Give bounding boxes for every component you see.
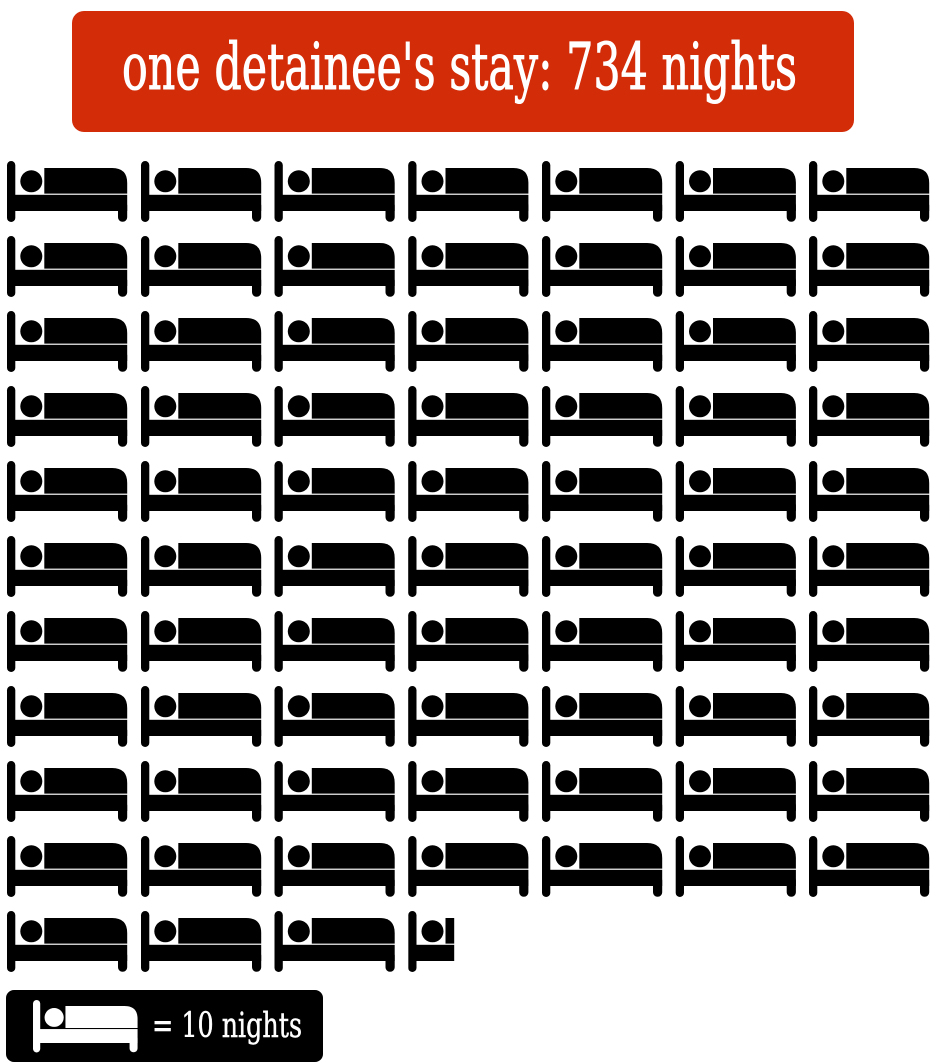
title banner bbox=[72, 11, 854, 132]
beds row 11 with partial bed bbox=[6, 911, 454, 972]
beds row 9 bbox=[7, 761, 929, 822]
legend bbox=[6, 990, 323, 1062]
beds row 5 bbox=[7, 461, 929, 522]
beds row 10 bbox=[7, 836, 929, 897]
icon: white bed bbox=[33, 1000, 138, 1052]
beds row 6 bbox=[7, 536, 929, 597]
beds row 2 bbox=[7, 236, 929, 297]
beds row 8 bbox=[7, 686, 929, 747]
legend text: = 10 nights bbox=[152, 1006, 302, 1046]
beds row 1 bbox=[7, 161, 929, 222]
beds row 4 bbox=[7, 386, 929, 447]
pictogram grid: 73.4 beds bbox=[7, 161, 929, 972]
beds row 7 bbox=[7, 611, 929, 672]
beds row 3 bbox=[7, 311, 929, 372]
